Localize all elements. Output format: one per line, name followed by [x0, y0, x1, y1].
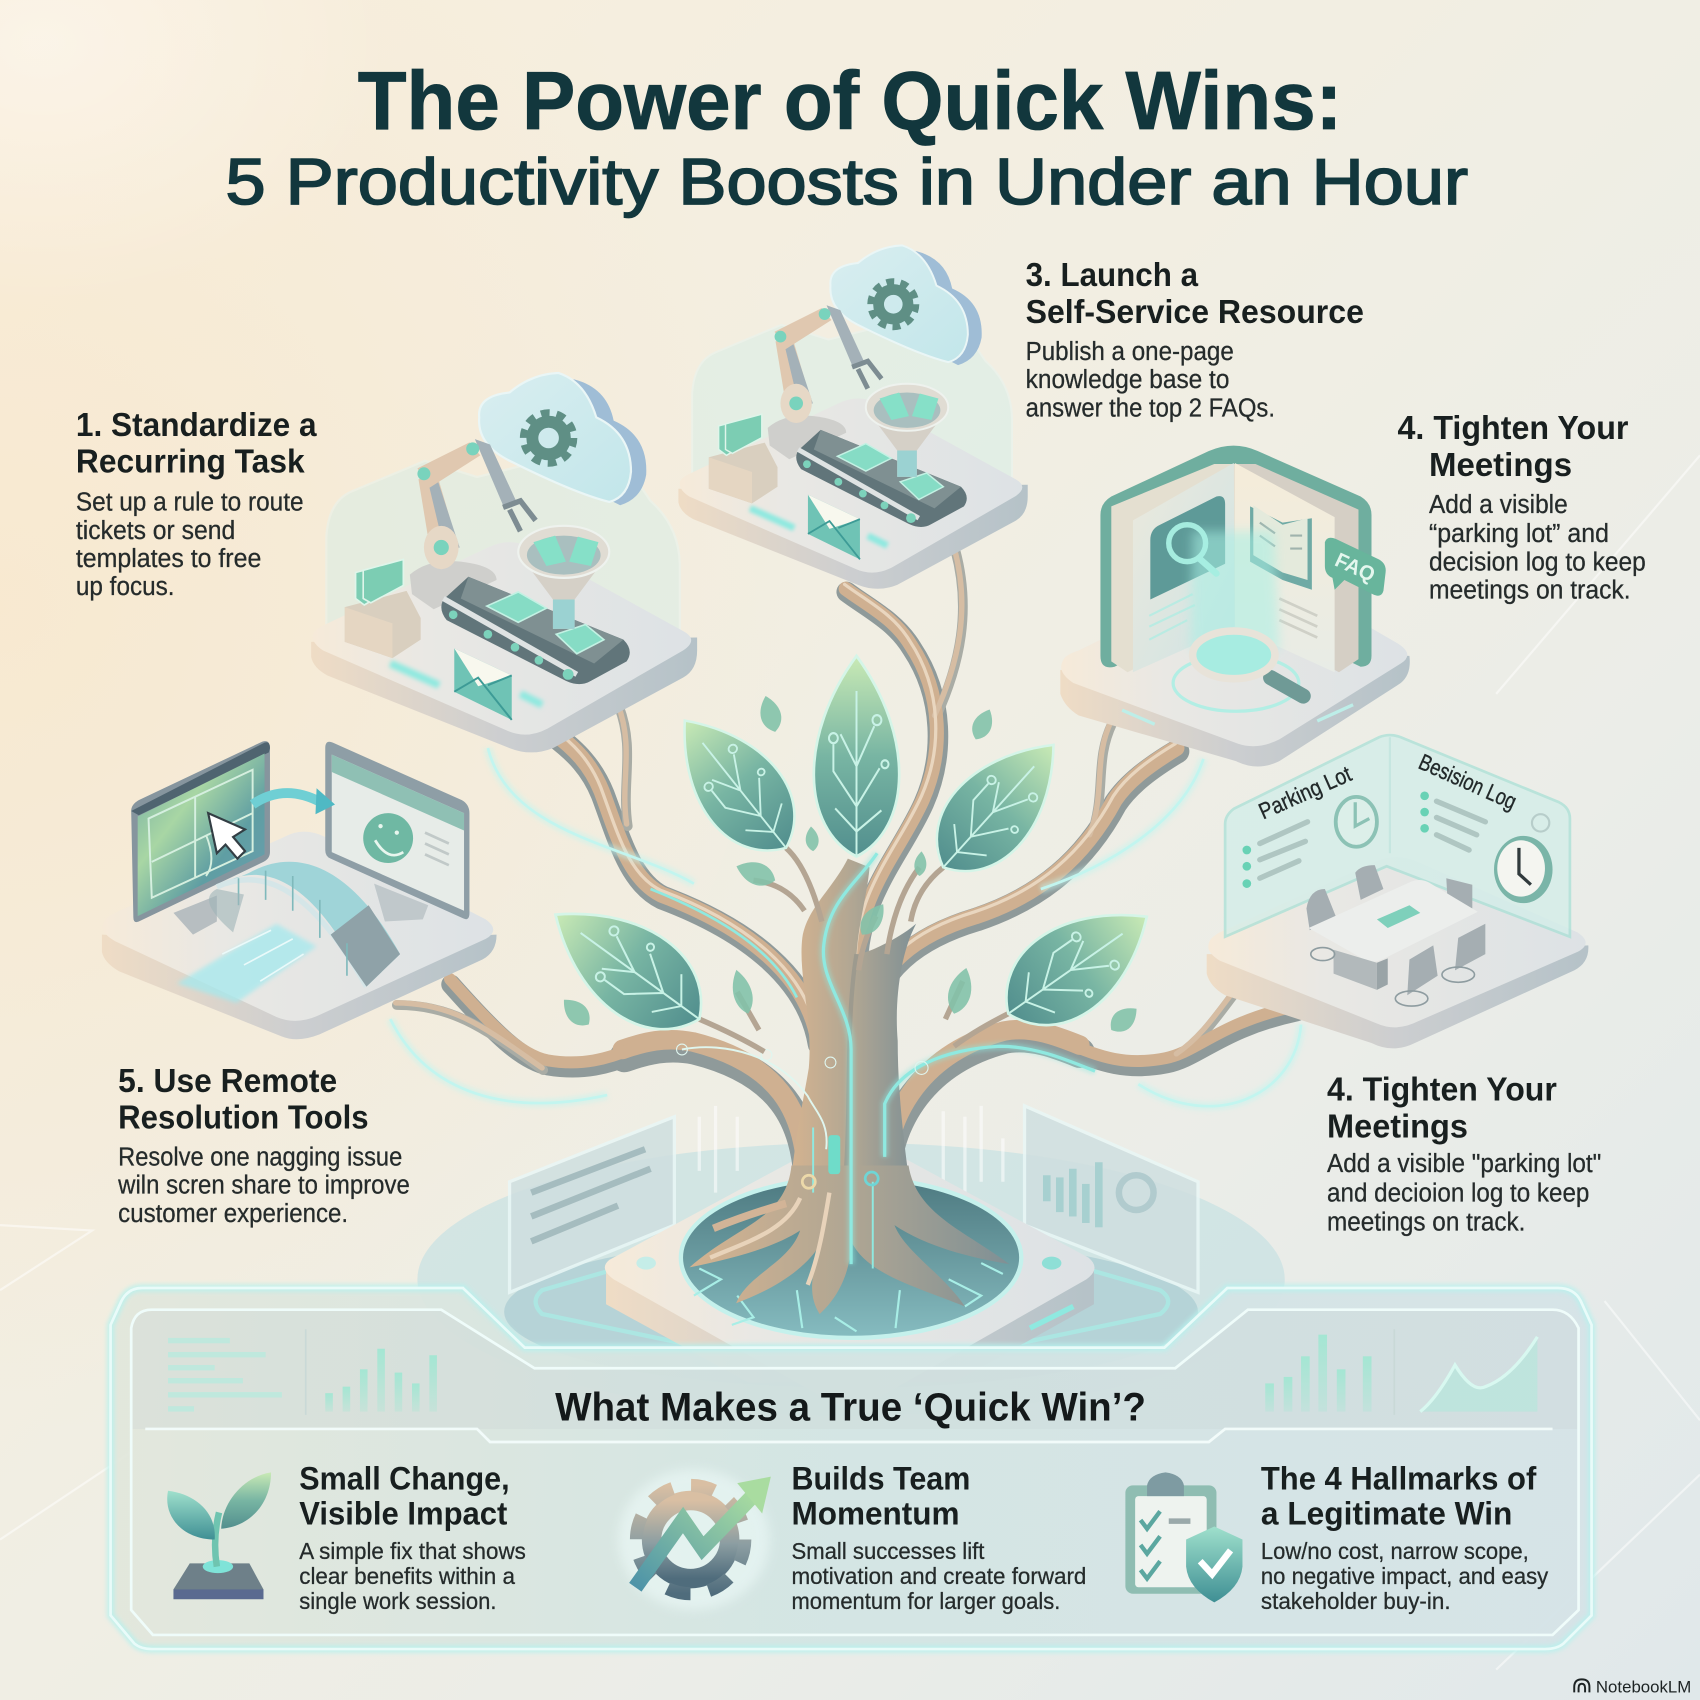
label: step 3: 3. Launch a — [1026, 257, 1198, 294]
label: step 1: Set up a rule to route — [76, 489, 304, 517]
label: step 4 upper: “parking lot” and — [1429, 520, 1609, 548]
text: small change: Small Change, — [299, 1461, 510, 1497]
label: step 1: Recurring Task — [76, 444, 305, 481]
icon: clipboard and shield — [1125, 1472, 1242, 1602]
roots — [690, 1165, 1009, 1314]
label: step 4 upper: meetings on track. — [1429, 576, 1631, 604]
label: step 1: up focus. — [76, 573, 175, 601]
floor disc and holographic screens — [417, 1106, 1285, 1416]
text: team momentum: Momentum — [791, 1495, 960, 1531]
text: hallmarks: a Legitimate Win — [1261, 1495, 1512, 1531]
text: small change: Visible Impact — [299, 1495, 508, 1531]
label: step 4 lower: Meetings — [1327, 1108, 1468, 1145]
label: step 5: Resolution Tools — [118, 1100, 369, 1137]
text: hallmarks: no negative impact, and easy — [1261, 1563, 1549, 1589]
illustration: meeting room platform: Parking Lot — [1255, 760, 1356, 824]
illustration: automation platform, step 1 — [311, 373, 697, 752]
label: step 1: templates to free — [76, 545, 261, 573]
label: step 3: knowledge base to — [1026, 366, 1229, 394]
illustration: remote resolution monitors platform — [102, 741, 497, 1039]
tree — [390, 548, 1301, 1314]
text: small change: A simple fix that shows — [299, 1538, 526, 1564]
label: step 5 — [117, 1063, 410, 1228]
label: step 3: Self-Service Resource — [1026, 294, 1364, 331]
label: step 5: wiln scren share to improve — [117, 1172, 410, 1200]
label: step 5: customer experience. — [118, 1200, 348, 1228]
illustration: automation platform, step 3 — [678, 245, 1028, 589]
text: team momentum: Small successes lift — [791, 1538, 985, 1564]
text: team momentum: motivation and create forward — [791, 1563, 1086, 1589]
label: step 4 lower — [1327, 1071, 1601, 1237]
leaves — [529, 656, 1172, 1055]
illustration: knowledge base book platform — [1060, 446, 1410, 767]
label: step 1 — [76, 407, 317, 601]
icon: gear with arrow — [618, 1469, 771, 1610]
label: step 4 upper: decision log to keep — [1429, 548, 1646, 576]
label: step 1: 1. Standardize a — [76, 407, 317, 444]
icon: sprout — [167, 1472, 271, 1599]
text: hallmarks — [1261, 1461, 1549, 1614]
text: team momentum: momentum for larger goals. — [791, 1588, 1060, 1614]
circuit lines — [651, 853, 1095, 1268]
branches — [396, 548, 1297, 1180]
label: step 4 upper: 4. Tighten Your — [1398, 410, 1628, 447]
text: small change: single work session. — [299, 1588, 497, 1614]
watermark: NotebookLM: NotebookLM — [1596, 1677, 1691, 1696]
text: hallmarks: The 4 Hallmarks of — [1261, 1461, 1536, 1497]
label: step 4 lower: Add a visible "parking lot" — [1327, 1150, 1601, 1178]
illustration: meeting room platform: Besision Log — [1415, 748, 1521, 815]
text: team momentum: Builds Team — [791, 1461, 970, 1497]
label: step 4 upper — [1398, 410, 1646, 604]
label: step 3 — [1026, 257, 1364, 422]
illustration: knowledge base book platform: FAQ — [1331, 549, 1378, 587]
title — [226, 55, 1468, 218]
label: step 3: answer the top 2 FAQs. — [1026, 394, 1275, 422]
text: team momentum — [791, 1461, 1086, 1614]
panel: what makes a true quick win — [111, 1288, 1592, 1659]
label: step 3: Publish a one-page — [1026, 338, 1234, 366]
glow swoops — [390, 748, 1301, 1106]
label: step 4 lower: meetings on track. — [1327, 1209, 1525, 1237]
text: hallmarks: stakeholder buy-in. — [1261, 1588, 1451, 1614]
label: step 5: 5. Use Remote — [118, 1063, 337, 1100]
chart: right column bars — [1265, 1329, 1394, 1415]
trunk — [791, 859, 916, 1176]
label: step 4 upper: Add a visible — [1429, 491, 1568, 519]
label: step 4 lower: and decioion log to keep — [1327, 1179, 1589, 1207]
chart: left list bars — [168, 1329, 306, 1415]
heading: what makes a true quick win: What Makes a True ‘Quick Win’? — [555, 1385, 1146, 1429]
title: 5 Productivity Boosts in Under an Hour — [226, 145, 1468, 218]
text: small change: clear benefits within a — [299, 1563, 515, 1589]
text: hallmarks: Low/no cost, narrow scope, — [1261, 1538, 1529, 1564]
illustration: meeting room platform — [1207, 735, 1588, 1048]
base platform — [536, 1140, 1168, 1408]
label: step 4 lower: 4. Tighten Your — [1327, 1071, 1557, 1108]
leaf stems — [699, 848, 1008, 1052]
label: step 1: tickets or send — [76, 517, 235, 545]
text: small change — [299, 1461, 526, 1614]
chart: right area chart — [1420, 1337, 1537, 1412]
label: step 4 upper: Meetings — [1429, 447, 1572, 484]
title: The Power of Quick Wins: — [358, 55, 1342, 147]
chart: left column bars — [325, 1349, 437, 1412]
label: step 5: Resolve one nagging issue — [118, 1143, 402, 1171]
